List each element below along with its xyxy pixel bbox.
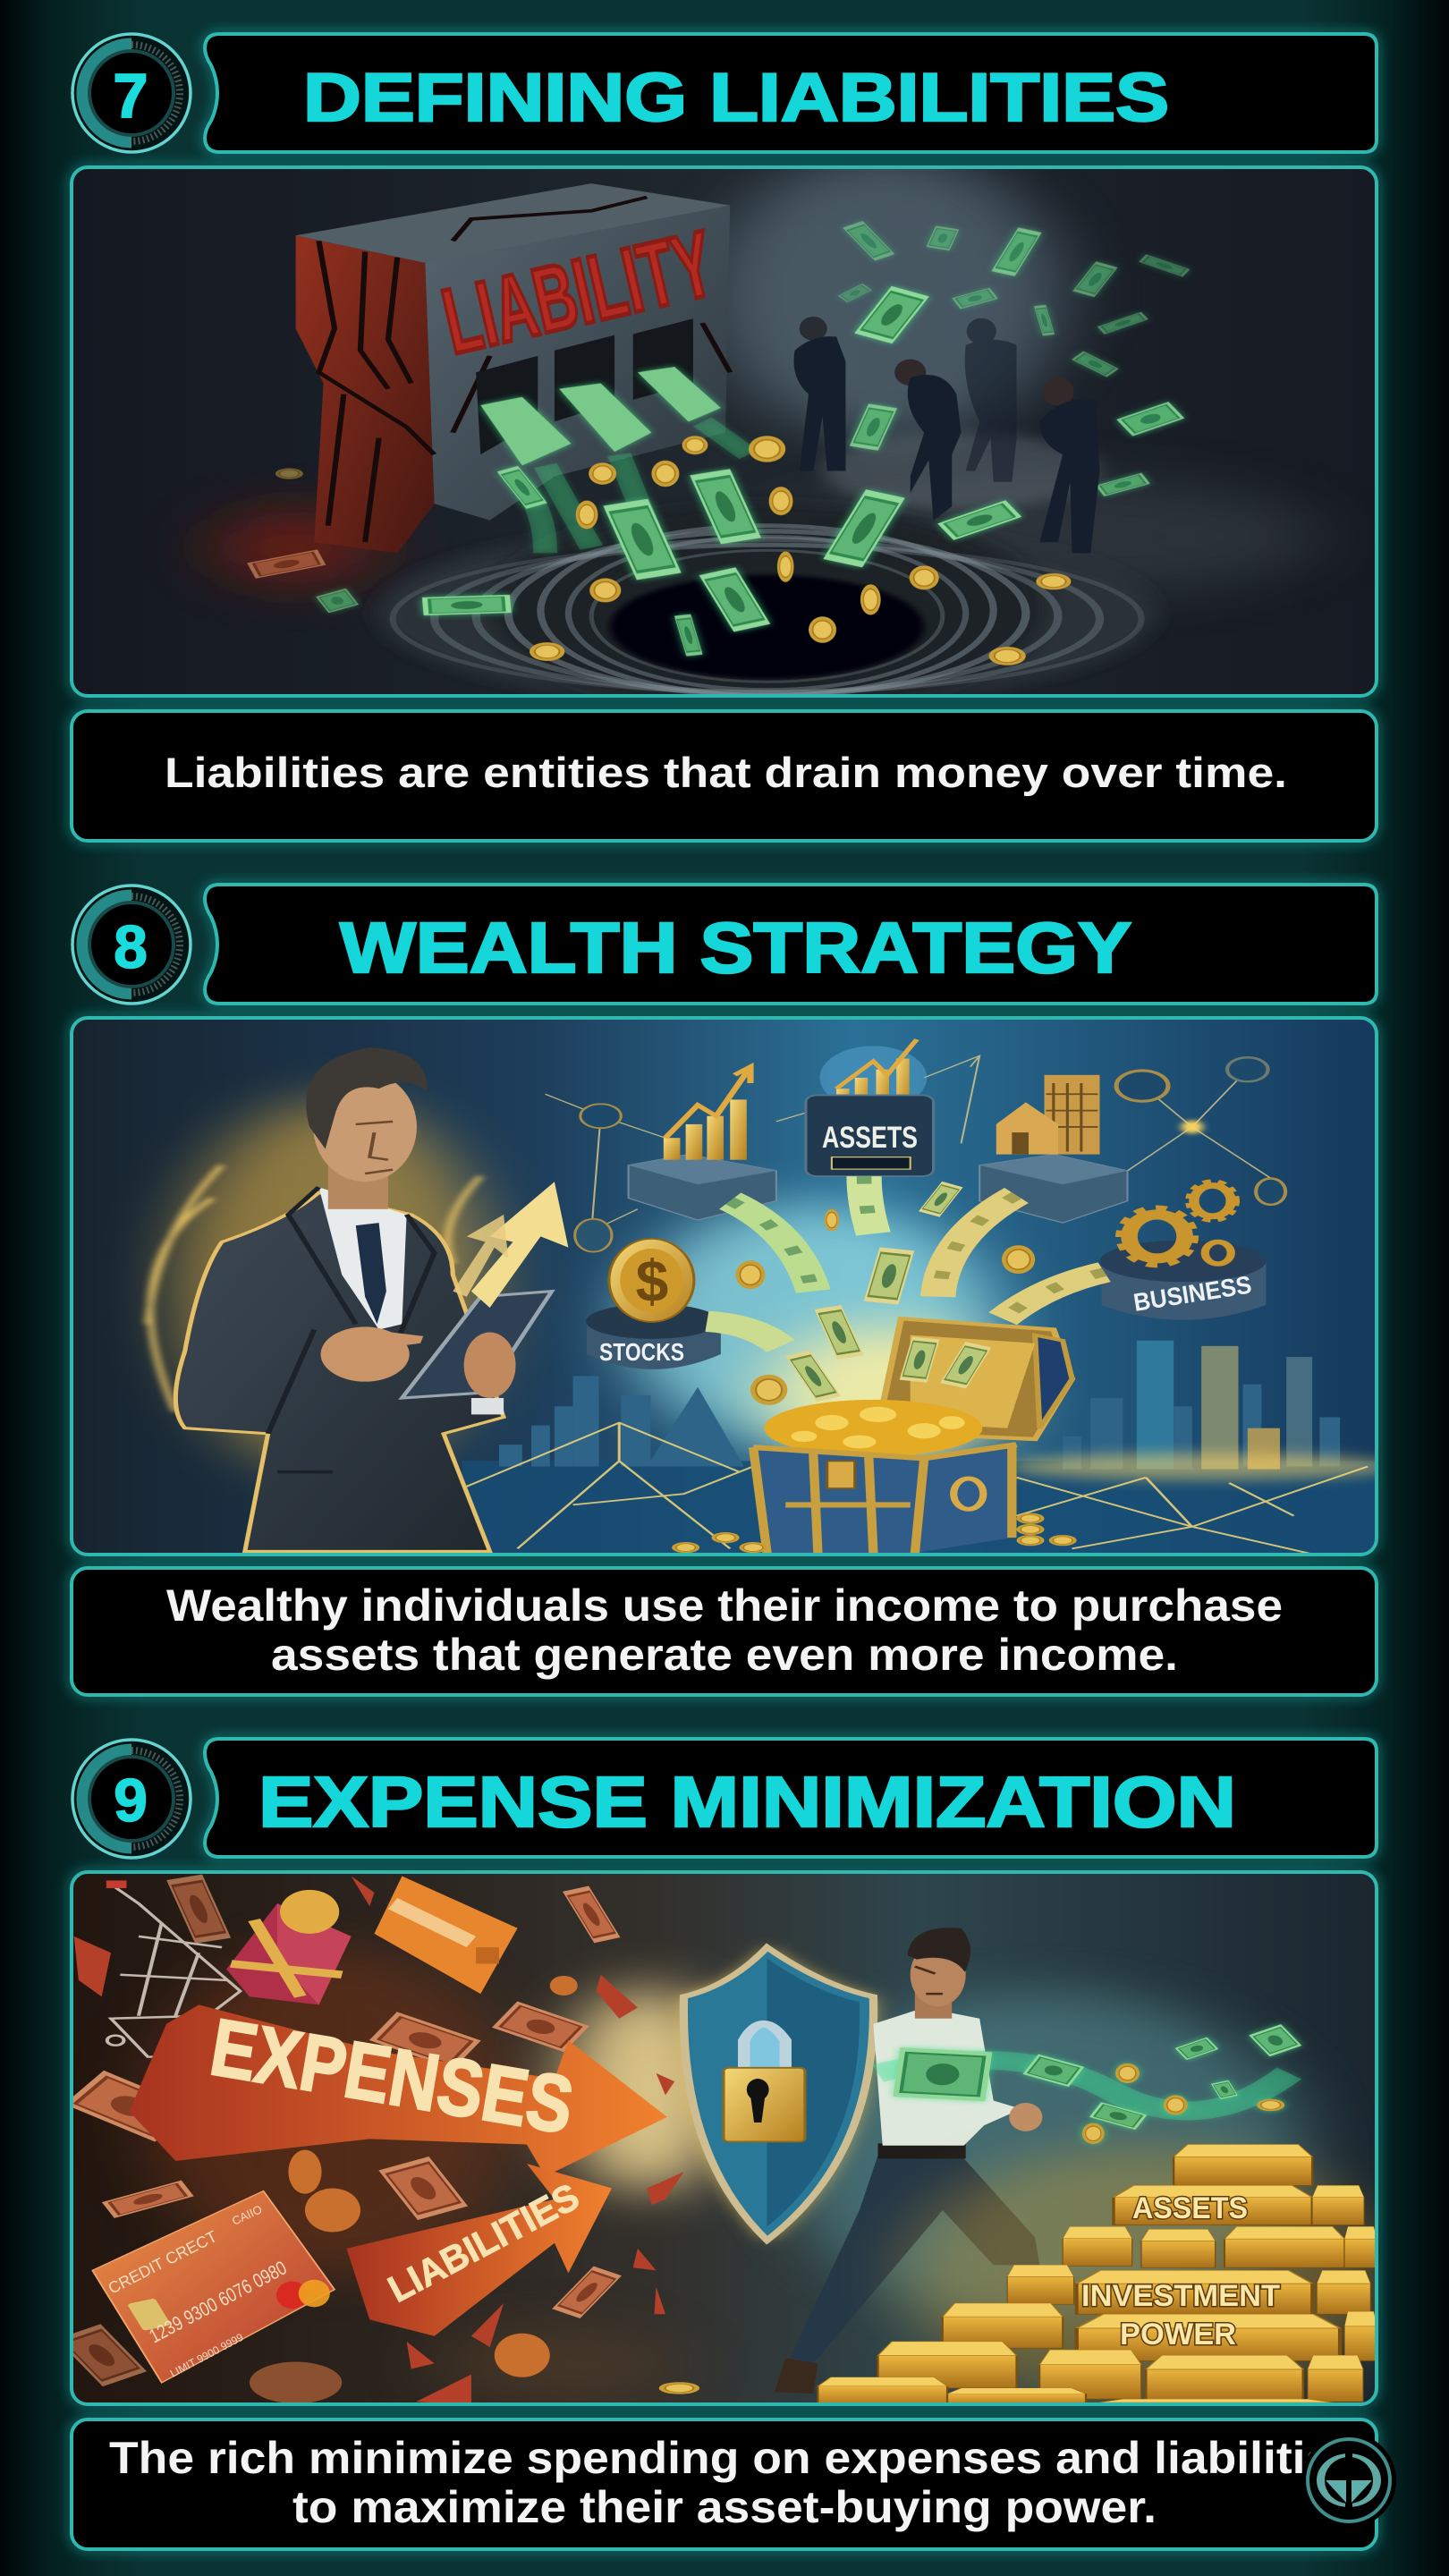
title bar: defining liabilities (205, 34, 1377, 152)
illustration panel: investor funding assets into a treasure chest (72, 1018, 1395, 1560)
flying bills and shards (56, 1875, 684, 2404)
bills pouring from slots (316, 221, 1191, 657)
label: card brand: CAIIO (230, 2202, 264, 2228)
coins (275, 436, 1071, 665)
number badge 8 (72, 886, 191, 1004)
loose gold coins (735, 1209, 1035, 1405)
investor in suit with tablet (148, 1047, 568, 1551)
title bar: defining liabilities: DEFINING LIABILITIES (303, 60, 1169, 136)
shopping cart (106, 1880, 241, 2073)
number badge 7 (72, 34, 191, 152)
label: assets on gold bar: ASSETS (1132, 2191, 1248, 2225)
section 7: defining liabilities (72, 34, 1377, 841)
caption: section 8: Wealthy individuals use their income to purchase (166, 1580, 1283, 1631)
label: card limit: LIMIT 9900 9999 (168, 2331, 246, 2380)
label: power on gold bar: POWER (1120, 2318, 1236, 2351)
big red arrow (130, 2004, 667, 2176)
gift box (226, 1890, 352, 2004)
title bar: expense minimization: EXPENSE MINIMIZATION (258, 1762, 1236, 1842)
whirlpool drain (379, 504, 1156, 712)
caption: section 7: Liabilities are entities that drain money over time. (165, 749, 1287, 796)
cracked block (296, 183, 730, 553)
number badge 7: 7 (114, 61, 148, 131)
corner logo badge (1301, 2433, 1396, 2528)
four despairing men (794, 317, 1100, 553)
orange card, top (374, 1877, 518, 1994)
caption: section 9: The rich minimize spending on expenses and liabilities (109, 2433, 1359, 2483)
label: expenses: EXPENSES (205, 2003, 580, 2151)
label: business: BUSINESS (1131, 1271, 1253, 1317)
section 8: wealth strategy (72, 885, 1395, 1695)
caption: section 7 (72, 711, 1377, 841)
golden network lines (462, 1055, 1368, 1554)
stocks pedestal with dollar coin (586, 1239, 721, 1369)
label on block: LIABILITY: LIABILITY (434, 212, 723, 374)
label: investment on gold bar: INVESTMENT (1081, 2279, 1280, 2313)
label: card holder text: CREDIT CRECT (106, 2227, 220, 2298)
label: stocks: STOCKS (599, 1338, 684, 1366)
title bar: expense minimization (205, 1739, 1377, 1857)
illustration panel: liability block draining money (72, 153, 1377, 712)
number badge 9 (72, 1740, 191, 1858)
section 9: expense minimization (56, 1739, 1386, 2549)
treasure chest full of gold (672, 1318, 1077, 1553)
small red arrow (346, 2164, 612, 2336)
illustration panel: shield blocking expenses, gold asset stack (56, 1872, 1386, 2410)
shield with padlock (683, 1947, 874, 2241)
caption: section 9 (72, 2419, 1377, 2549)
green money stream (878, 2024, 1301, 2144)
label: liabilities: LIABILITIES (381, 2175, 586, 2310)
number badge 8: 8 (114, 913, 148, 981)
dollar sign on coin: $ (636, 1248, 668, 1314)
income bills flowing into chest (707, 1176, 1105, 1402)
title bar: wealth strategy (205, 885, 1377, 1004)
title bar: wealth strategy: WEALTH STRATEGY (340, 908, 1131, 987)
caption: section 8 (72, 1568, 1377, 1695)
caption: section 9: to maximize their asset-buying power. (292, 2482, 1157, 2532)
number badge 9: 9 (114, 1767, 148, 1835)
stacked gold bars (818, 2145, 1386, 2410)
credit card (92, 2191, 335, 2383)
asset pedestals and icons (575, 1039, 1285, 1252)
fog around men (823, 433, 1100, 509)
caption: section 8: assets that generate even more income. (271, 1630, 1178, 1680)
label: card number: 1239 9300 6076 0980 (146, 2257, 290, 2347)
angry man pushing shield (775, 1928, 1042, 2394)
city skyline (499, 1341, 1340, 1470)
business pedestal with gears (1100, 1182, 1266, 1320)
label: assets: ASSETS (822, 1121, 918, 1155)
